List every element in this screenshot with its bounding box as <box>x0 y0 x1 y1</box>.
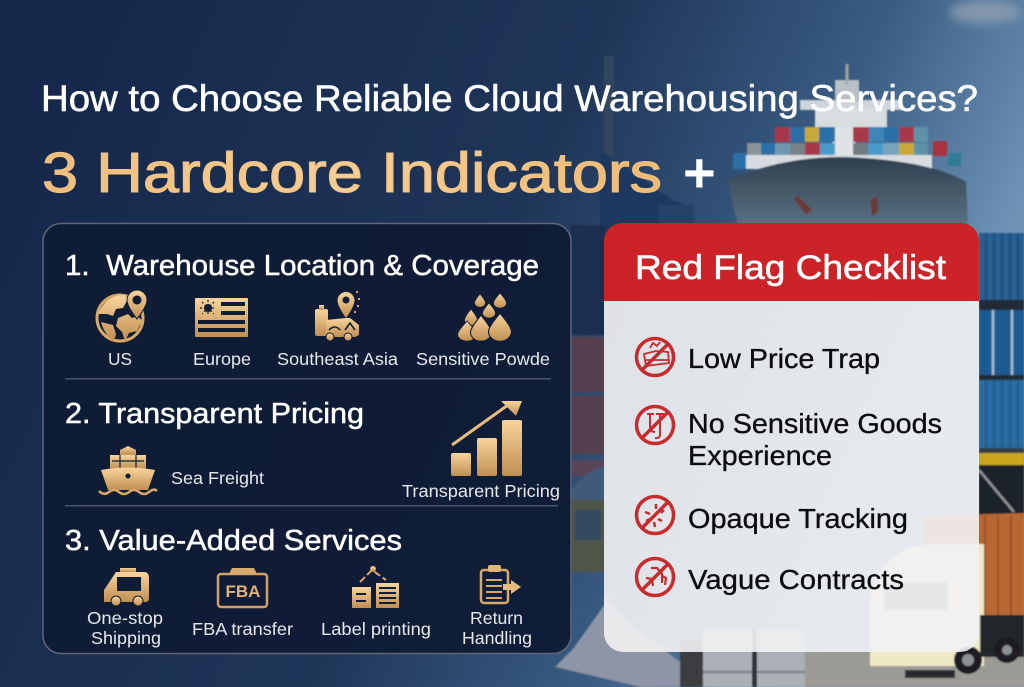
icon: FBA box <box>218 568 267 607</box>
subtitle: 3 Hardcore Indicators +: + <box>683 141 716 204</box>
icon: powder drops <box>458 293 512 341</box>
icon: no vague contracts <box>636 558 674 596</box>
panel: hardcore indicators <box>43 224 571 654</box>
item: low price trap: Low Price Trap <box>688 343 880 374</box>
icon: vehicle with pin <box>315 291 359 341</box>
item: no sensitive goods experience <box>688 408 942 471</box>
icon: no low price <box>636 338 674 376</box>
label: FBA transfer: FBA transfer <box>192 619 293 639</box>
ground <box>680 652 1024 687</box>
icon: no opaque tracking <box>636 496 674 534</box>
icon: no sensitive goods <box>636 406 674 444</box>
icon: flag <box>195 298 248 337</box>
label: US: US <box>108 349 132 369</box>
icon: return clipboard <box>481 565 521 603</box>
icon: FBA box: FBA <box>226 582 260 601</box>
header: red banner <box>604 223 979 301</box>
item: opaque tracking: Opaque Tracking <box>688 503 908 534</box>
label: Return Handling: Handling <box>462 628 532 648</box>
icon: ship <box>99 446 157 494</box>
label: Return Handling <box>462 608 532 648</box>
panel: red flag checklist <box>604 223 979 652</box>
label: Label printing: Label printing <box>321 619 431 639</box>
label: One-stop Shipping: One-stop <box>87 608 163 628</box>
label: Sensitive Powde: Sensitive Powde <box>416 349 550 369</box>
ship <box>800 100 902 110</box>
subtitle: 3 Hardcore Indicators +: 3 Hardcore Indicators <box>42 141 662 205</box>
left strip <box>571 225 605 335</box>
heading: value-added services: 3. Value-Added Services <box>65 525 402 557</box>
item: no sensitive goods experience: Experience <box>688 440 832 471</box>
label: Southeast Asia: Southeast Asia <box>277 349 398 369</box>
icon: van <box>104 568 149 606</box>
item: no sensitive goods experience: No Sensitive Goods <box>688 408 942 439</box>
icon: globe with pin <box>97 290 147 341</box>
icon: label printing <box>352 566 399 608</box>
item: vague contracts: Vague Contracts <box>688 564 904 595</box>
right container stack <box>979 233 1024 300</box>
label: One-stop Shipping <box>87 608 163 648</box>
label: Europe: Europe <box>193 349 251 369</box>
heading: transparent pricing: 2. Transparent Pricing <box>65 398 364 430</box>
title line: How to Choose Reliable Cloud Warehousing Services? <box>41 78 978 119</box>
label: Sea Freight: Sea Freight <box>171 468 264 488</box>
label: Return Handling: Return <box>470 608 523 628</box>
heading: warehouse location: 1. Warehouse Location & Coverage <box>65 250 539 282</box>
label: One-stop Shipping: Shipping <box>91 628 161 648</box>
label: Transparent Pricing: Transparent Pricing <box>402 481 560 501</box>
orange container <box>925 513 1024 620</box>
truck <box>870 544 984 666</box>
chart icon: rising bars with arrow <box>451 401 522 476</box>
drums <box>703 630 752 687</box>
header: red banner: Red Flag Checklist <box>635 249 947 287</box>
